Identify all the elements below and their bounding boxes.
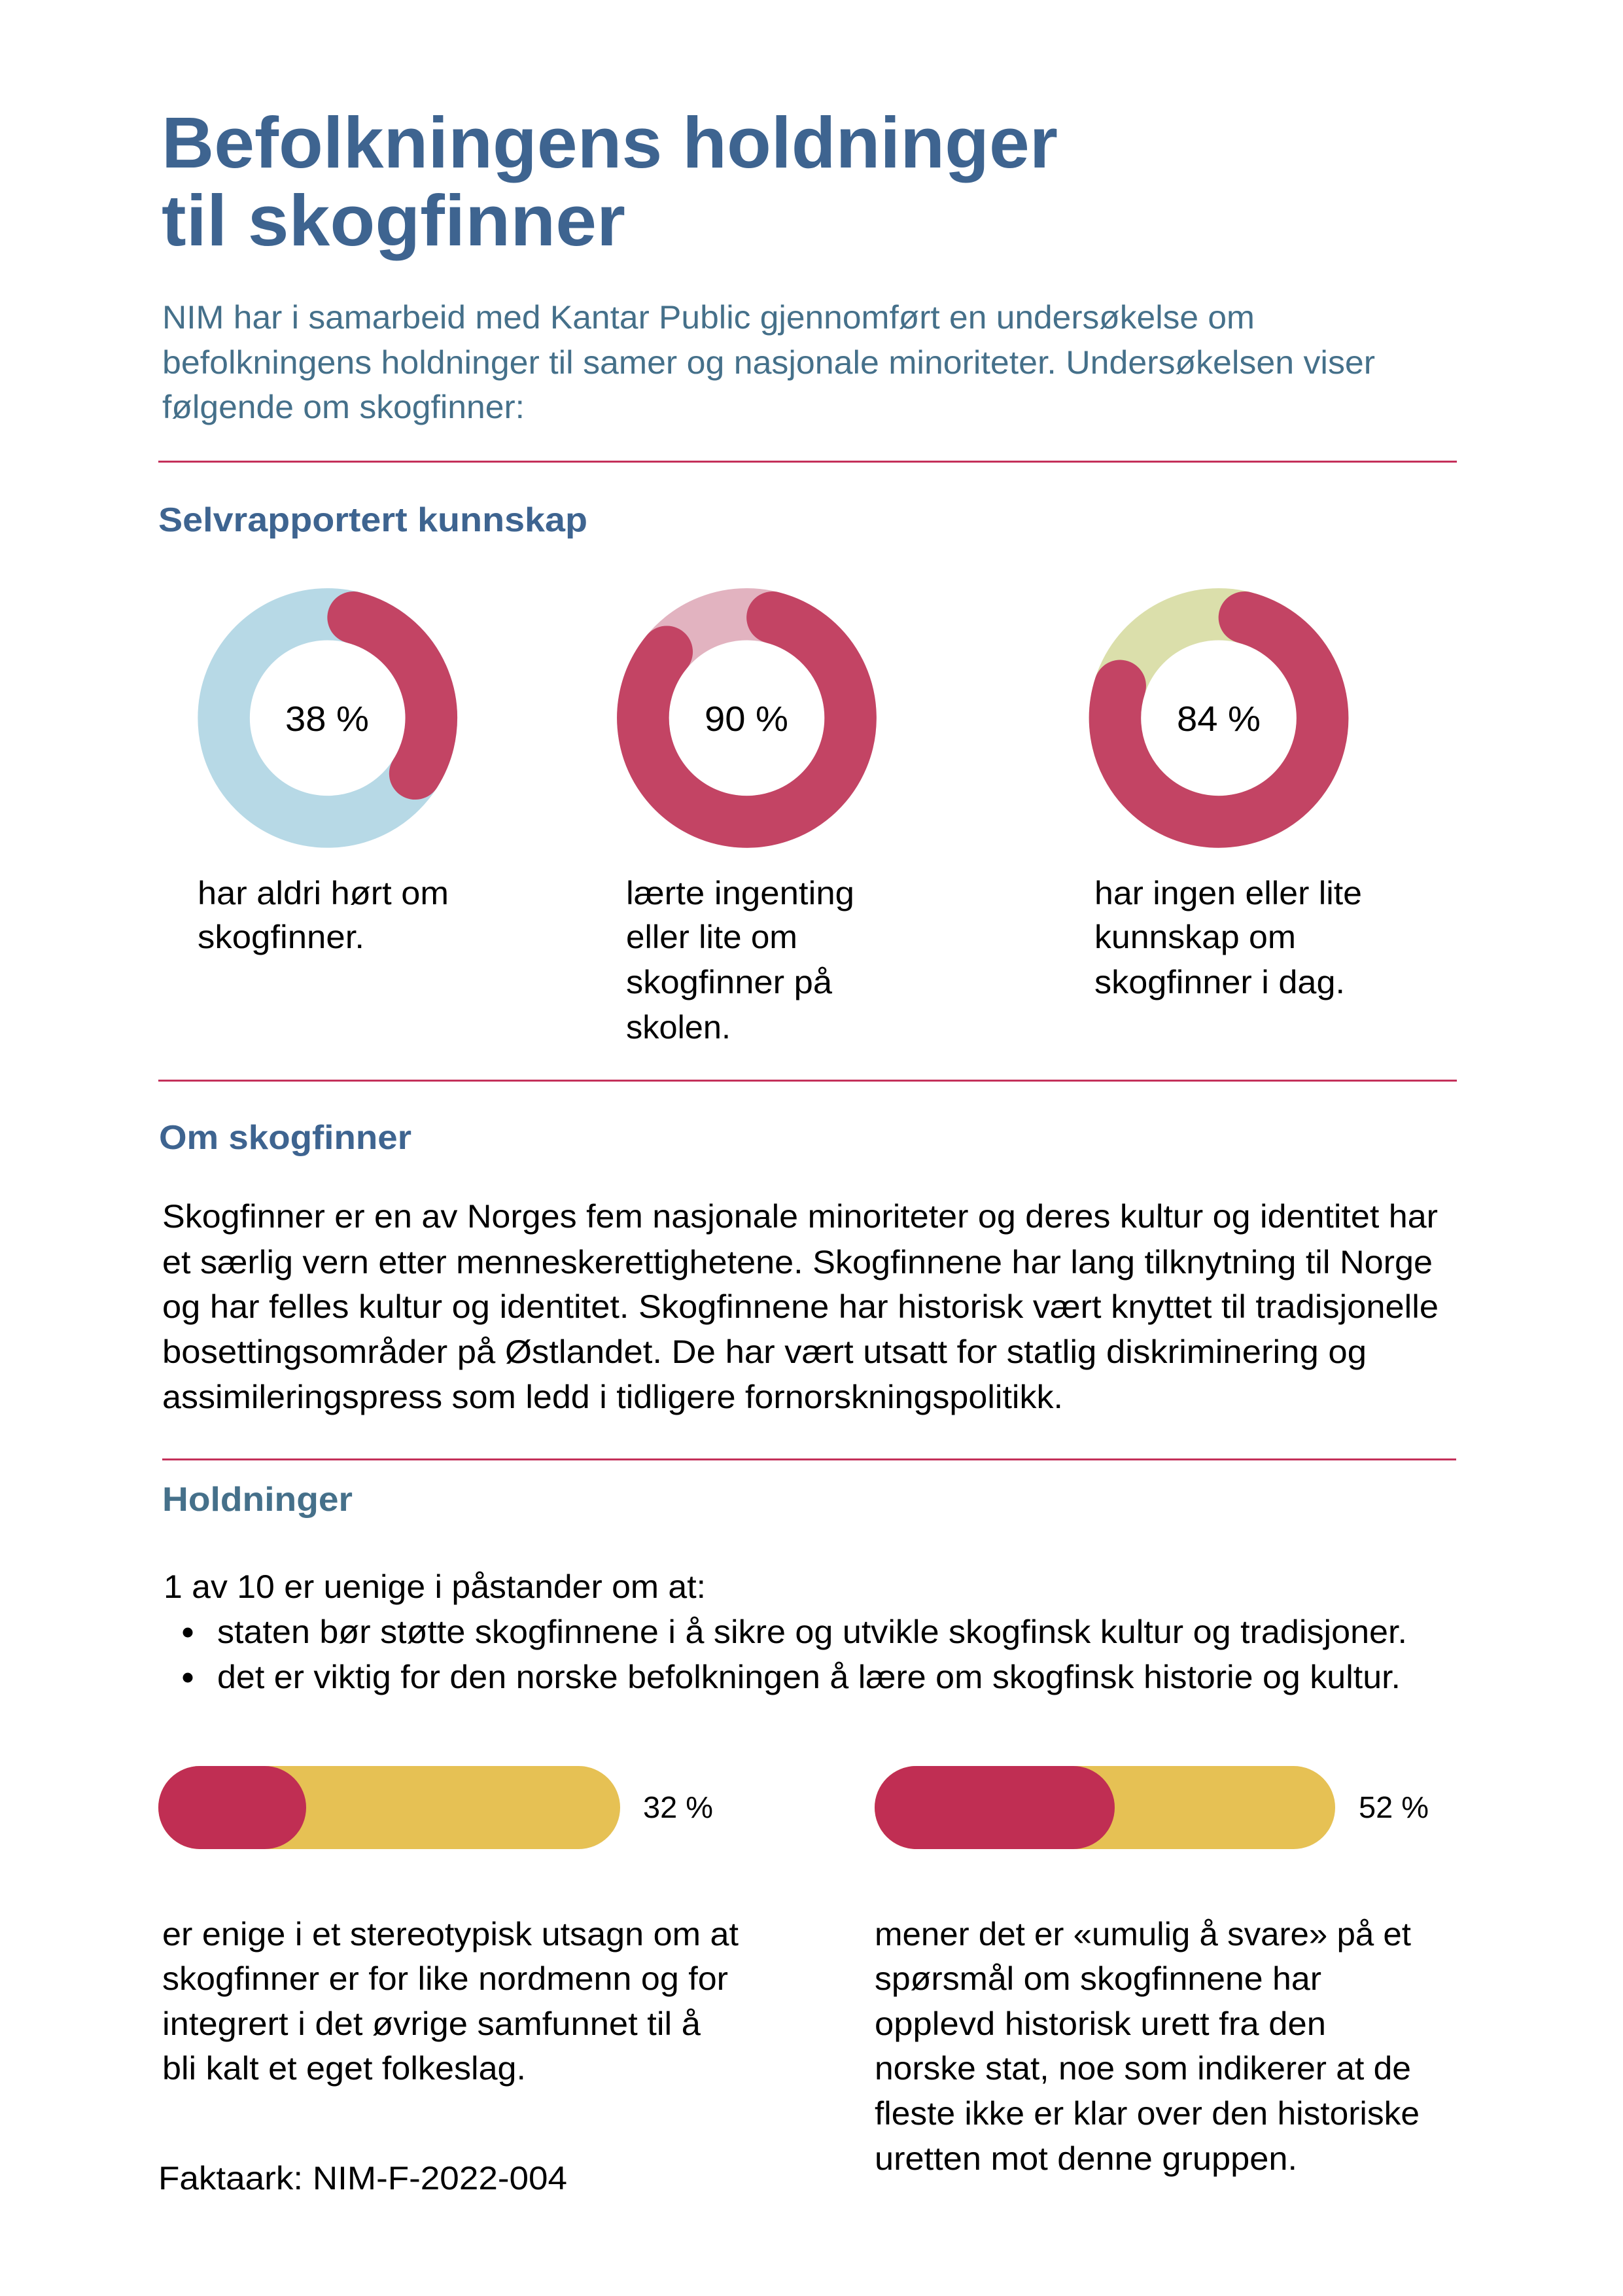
intro text: befolkningens holdninger til samer og nasjonale minoriteter. Undersøkelsen viser bbox=[162, 344, 1375, 381]
donut label: 84 % bbox=[1094, 875, 1362, 1000]
text block: 52 % explanation: spørsmål om skogfinnene har bbox=[875, 1960, 1321, 1997]
text block: 32 % explanation: skogfinner er for like nordmenn og for bbox=[162, 1960, 728, 1997]
text block: 52 % explanation: uretten mot denne gruppen. bbox=[875, 2140, 1297, 2177]
footer: fact sheet reference: Faktaark: NIM-F-2022-004 bbox=[158, 2160, 567, 2197]
donut label: 90 % bbox=[626, 875, 854, 1046]
panel: donut 84 %: 84 % bbox=[1177, 699, 1261, 739]
text block: 32 % explanation: bli kalt et eget folkeslag. bbox=[162, 2050, 526, 2087]
bar chart: 32 %: 32 % bbox=[643, 1790, 713, 1824]
intro text: NIM har i samarbeid med Kantar Public gjennomført en undersøkelse om bbox=[162, 299, 1255, 336]
panel: donut 90 %: 90 % bbox=[705, 699, 788, 739]
intro text bbox=[162, 299, 1375, 425]
text block: 52 % explanation: opplevd historisk urett fra den bbox=[875, 2005, 1326, 2042]
bar chart: 52 % bbox=[875, 1766, 1429, 1849]
heading: Selvrapportert kunnskap: Selvrapportert kunnskap bbox=[158, 501, 587, 539]
text block: Om skogfinner: Skogfinner er en av Norges fem nasjonale minoriteter og deres kultur og identitet har bbox=[162, 1198, 1438, 1235]
text block: 32 % explanation: integrert i det øvrige samfunnet til å bbox=[162, 2005, 701, 2042]
text block: Holdninger with bullets: staten bør støtte skogfinnene i å sikre og utvikle skogfinsk kultur og tradisjoner. bbox=[217, 1614, 1407, 1650]
donut label: 38 %: skogfinner. bbox=[198, 919, 364, 955]
donut label: 90 %: eller lite om bbox=[626, 919, 797, 955]
panel: donut 90 % bbox=[643, 614, 850, 822]
text block: Holdninger with bullets: 1 av 10 er uenige i påstander om at: bbox=[164, 1568, 706, 1605]
text block: 32 % explanation bbox=[162, 1916, 739, 2087]
donut label: 90 %: skogfinner på bbox=[626, 964, 832, 1000]
text block: Om skogfinner: og har felles kultur og identitet. Skogfinnene har historisk vært knyttet til tradisjonelle bbox=[162, 1288, 1439, 1325]
text block: Om skogfinner: et særlig vern etter menneskerettighetene. Skogfinnene har lang tilknytning til Norge bbox=[162, 1244, 1433, 1280]
text block: 52 % explanation: mener det er «umulig å svare» på et bbox=[875, 1916, 1411, 1952]
text block: Holdninger with bullets bbox=[164, 1568, 1407, 1695]
panel: donut 84 % bbox=[1115, 614, 1323, 822]
text block: Om skogfinner: bosettingsområder på Østlandet. De har vært utsatt for statlig diskriminering og bbox=[162, 1333, 1367, 1370]
donut label: 84 %: har ingen eller lite bbox=[1094, 875, 1362, 911]
bar chart: 32 % bbox=[158, 1766, 713, 1849]
heading: Holdninger: Holdninger bbox=[162, 1481, 353, 1519]
text block: Om skogfinner bbox=[162, 1198, 1439, 1415]
title: til skogfinner bbox=[162, 181, 625, 261]
panel: donut 38 % bbox=[224, 614, 431, 822]
donut label: 84 %: skogfinner i dag. bbox=[1094, 964, 1345, 1000]
text block: 52 % explanation bbox=[875, 1916, 1420, 2177]
intro text: følgende om skogfinner: bbox=[162, 389, 525, 425]
donut label: 38 %: har aldri hørt om bbox=[198, 875, 449, 911]
donut label: 84 %: kunnskap om bbox=[1094, 919, 1296, 955]
donut label: 90 %: skolen. bbox=[626, 1009, 731, 1046]
text block: 52 % explanation: fleste ikke er klar over den historiske bbox=[875, 2095, 1420, 2132]
text block: 32 % explanation: er enige i et stereotypisk utsagn om at bbox=[162, 1916, 739, 1952]
text block: Om skogfinner: assimileringspress som ledd i tidligere fornorskningspolitikk. bbox=[162, 1379, 1063, 1415]
bar chart: 52 %: 52 % bbox=[1359, 1790, 1429, 1824]
donut label: 38 % bbox=[198, 875, 449, 955]
heading: Om skogfinner: Om skogfinner bbox=[159, 1119, 411, 1157]
title: Befolkningens holdninger bbox=[162, 103, 1058, 183]
donut label: 90 %: lærte ingenting bbox=[626, 875, 854, 911]
text block: Holdninger with bullets: det er viktig for den norske befolkningen å lære om skogfinsk historie og kultur. bbox=[217, 1659, 1401, 1695]
title bbox=[162, 103, 1058, 261]
text block: 52 % explanation: norske stat, noe som indikerer at de bbox=[875, 2050, 1411, 2087]
panel: donut 38 %: 38 % bbox=[285, 699, 369, 739]
